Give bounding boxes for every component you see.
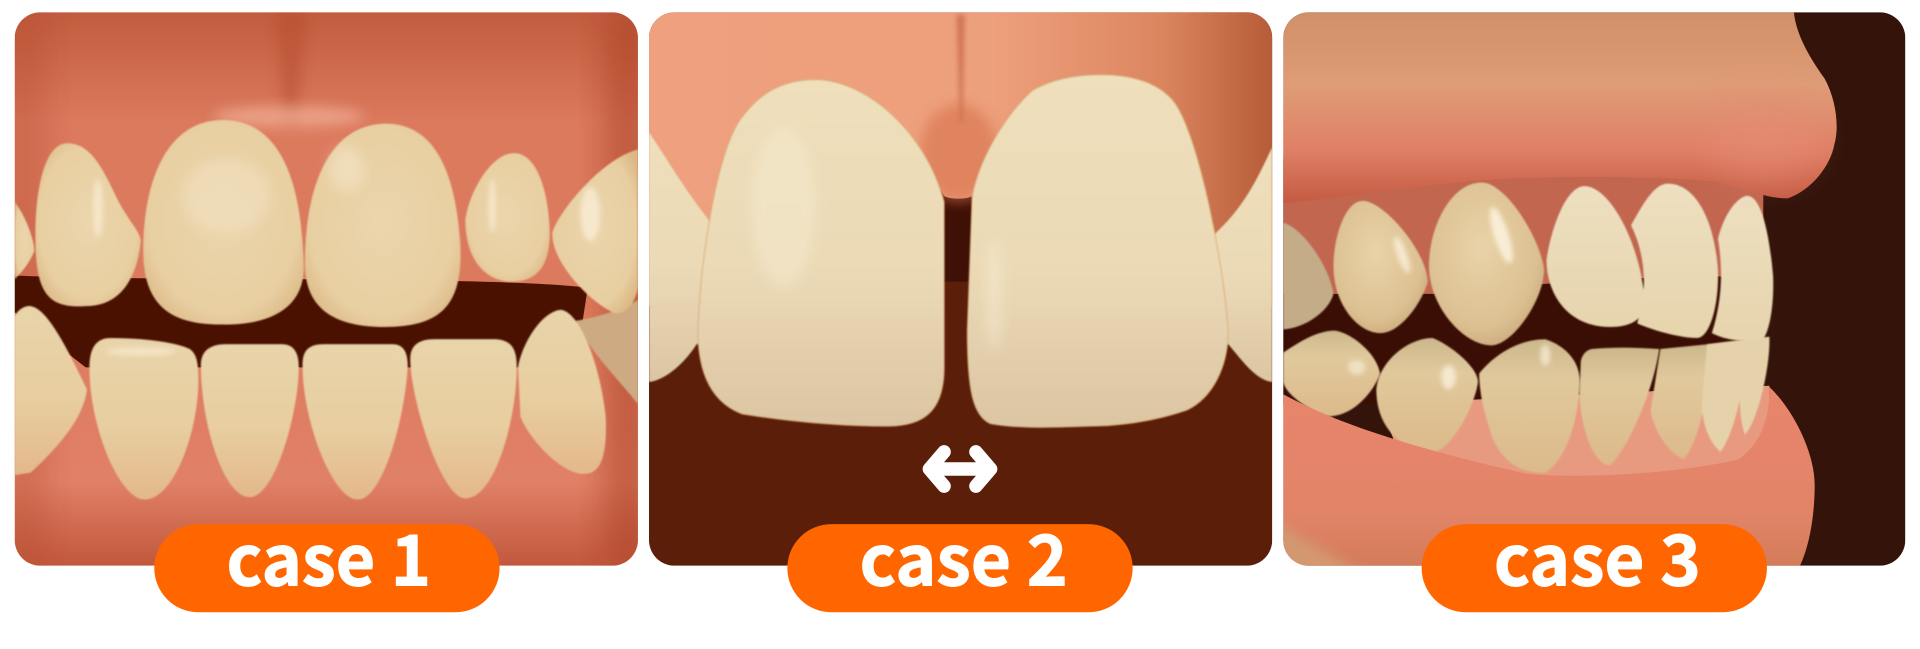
label: case 1: [154, 505, 500, 612]
upper teeth: [15, 120, 550, 327]
label: case 2: case 2: [860, 505, 1068, 606]
upper teeth: [1283, 182, 1773, 345]
lower teeth: [1283, 331, 1769, 473]
panel: case 1 photo, frontal view of teeth: [0, 12, 650, 566]
panel: case 3 photo, side view of teeth: [1273, 12, 1905, 576]
side teeth: [649, 132, 1272, 382]
label: case 2: [787, 505, 1133, 612]
panel: case 2 photo, central teeth with a gap: [649, 12, 1272, 566]
lower teeth: [15, 149, 638, 500]
label: case 1: case 1: [227, 505, 431, 606]
label: case 3: [1422, 505, 1767, 612]
lower lip: [1283, 387, 1815, 566]
dark mouth opening: [15, 276, 588, 367]
inner mouth: [1283, 159, 1284, 404]
label: case 3: case 3: [1494, 505, 1701, 606]
upper lip and skin: [1283, 12, 1837, 203]
central incisors: [698, 75, 1228, 427]
gum: [649, 12, 1272, 306]
icon: double-headed arrow showing gap: [929, 452, 991, 486]
